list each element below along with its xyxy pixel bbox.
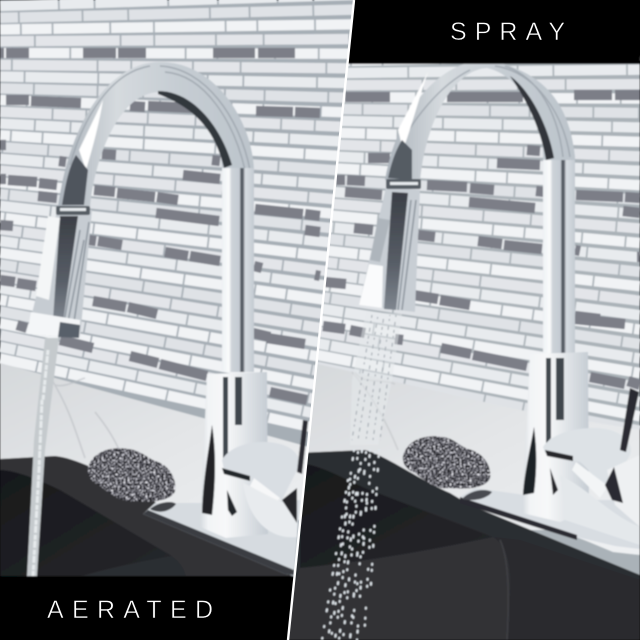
panel: spray faucet photo [289,55,640,640]
dark accent tiles [320,95,640,385]
pull-down spray head [359,179,421,312]
spray water [322,312,402,640]
diagonal divider [288,0,354,640]
black sink deck [0,455,292,578]
faucet spout [58,62,254,372]
aerated water stream [27,338,59,576]
faucet base and handle [522,352,640,545]
caption: spray: SPRAY [450,18,565,46]
faucet base and handle [200,372,308,538]
top caption bar [340,0,640,64]
faucet spout [385,60,575,360]
faucet deck plate [143,500,300,575]
marble backsplash [300,360,640,530]
icon: steel scrubber [88,448,175,502]
black sink deck [280,450,640,640]
tile wall rows [0,0,360,438]
icon: steel scrubber [403,436,490,489]
caption: aerated: AERATED [47,596,213,624]
dark accent tiles [0,53,320,400]
bottom caption bar [0,576,300,640]
pull-down spray head [27,206,92,338]
faucet deck plate [460,488,640,555]
panel: aerated faucet photo [0,0,353,578]
marble backsplash [0,363,320,520]
tile wall rows [300,55,640,431]
